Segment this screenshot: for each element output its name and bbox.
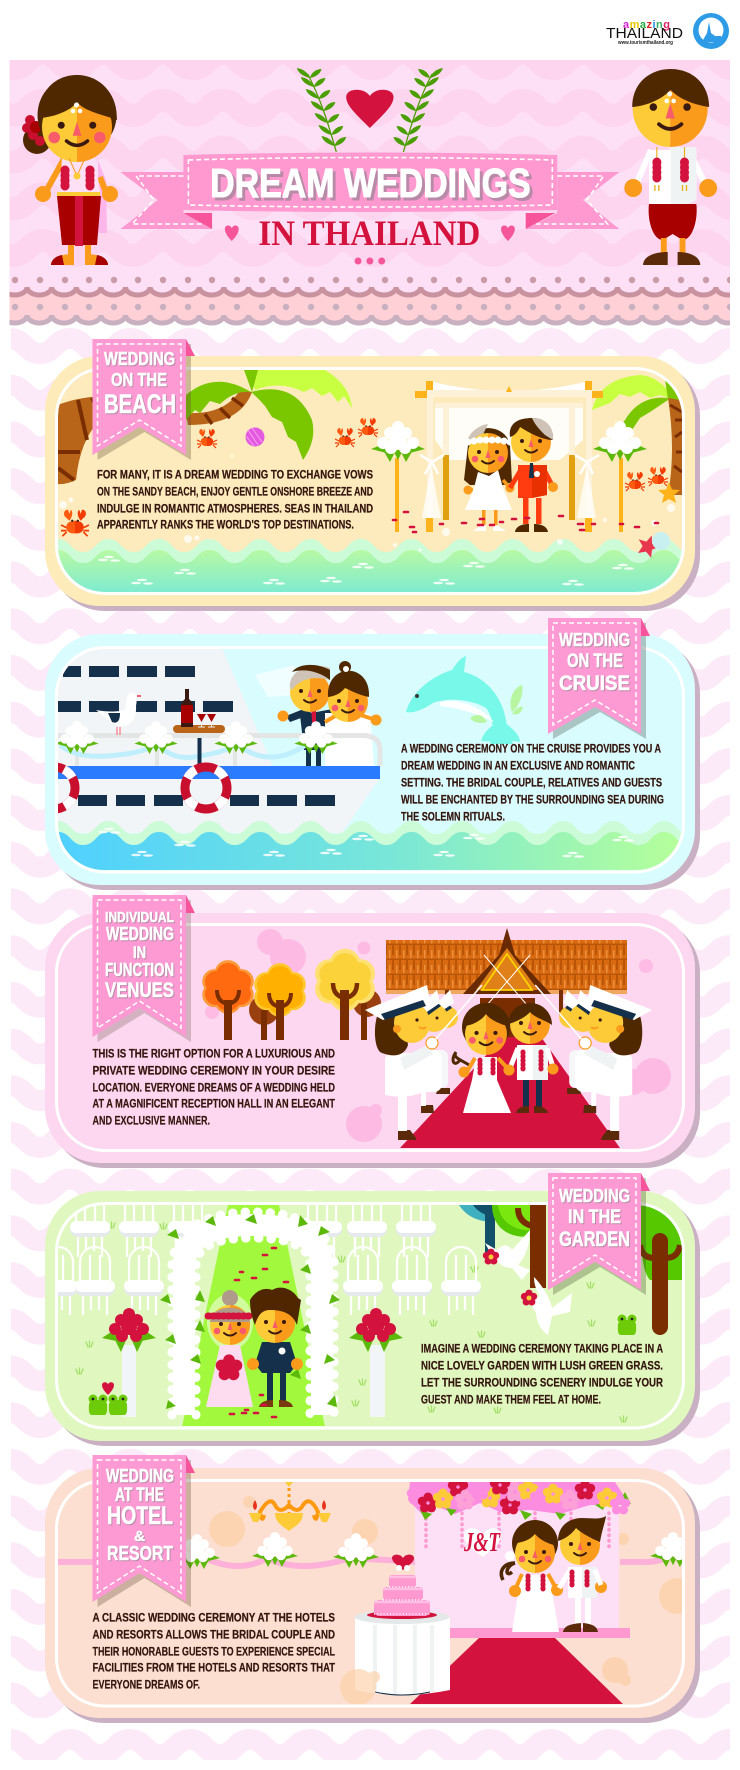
ship hull: [58, 648, 380, 833]
text: cruise description: DREAM WEDDING IN AN EXCLUSIVE AND ROMANTIC: [401, 758, 635, 772]
text: cruise description: WILL BE ENCHANTED BY THE SURROUNDING SEA DURING: [401, 792, 664, 806]
logo: amazing thailand: THAILAND: [606, 25, 683, 42]
header centre artwork: [120, 68, 619, 264]
panel: wedding on the beach: [45, 339, 714, 620]
text: venues description: AND EXCLUSIVE MANNER.: [92, 1114, 210, 1128]
ribbon: wedding on the beach: [92, 339, 195, 460]
ribbon: individual wedding in function venues: WEDDING: [106, 924, 174, 944]
thai pavilion: [386, 928, 627, 1040]
rose petals: [393, 512, 658, 532]
monogram heart: J&T: [463, 1527, 501, 1557]
ribbon tails: [120, 172, 619, 229]
ribbon: wedding in the garden: GARDEN: [559, 1228, 630, 1251]
panel: wedding on the cruise: [33, 618, 714, 902]
text: venues description: [92, 1046, 336, 1128]
panel: wedding in the garden: [38, 1173, 700, 1446]
wedding cake: [367, 1555, 437, 1619]
panel: individual wedding in function venues: [45, 895, 700, 1168]
lace border: [2, 277, 740, 323]
bubbles: [209, 1496, 695, 1686]
wedding arch: [371, 381, 647, 532]
text: cruise description: THE SOLEMN RITUALS.: [401, 810, 505, 824]
text: hotel description: FACILITIES FROM THE HOTELS AND RESORTS THAT: [92, 1660, 336, 1674]
bubbles: [205, 929, 671, 1142]
subtitle: IN THAILAND: [258, 213, 480, 253]
text: beach description: ON THE SANDY BEACH, ENJOY GENTLE ONSHORE BREEZE AND: [97, 484, 373, 498]
wedding table: [354, 1610, 450, 1695]
white flowers on swag: [174, 1532, 696, 1569]
ribbon: wedding on the beach: ON THE: [111, 370, 167, 390]
ribbon: wedding at the hotel and resort: &: [134, 1528, 145, 1545]
icon: small hearts and dots: [225, 225, 515, 264]
text: beach description: [97, 468, 373, 532]
text: hotel description: AND RESORTS ALLOWS THE BRIDAL COUPLE AND: [92, 1628, 335, 1642]
backdrop stage: [415, 1500, 630, 1638]
ribbon: wedding on the beach: BEACH: [104, 389, 176, 419]
ribbon: individual wedding in function venues: FUNCTION: [105, 960, 174, 980]
ribbon: individual wedding in function venues: VENUES: [105, 979, 174, 1002]
venue scene: [202, 928, 671, 1148]
pink swag: [58, 1555, 672, 1566]
water: [58, 532, 682, 592]
palm tree left: [58, 370, 352, 484]
grass aisle: [182, 1205, 325, 1427]
red carpet: [400, 1037, 620, 1148]
text: beach description: INDULGE IN ROMANTIC ATMOSPHERES. SEAS IN THAILAND: [97, 502, 373, 516]
bride and groom: [464, 418, 558, 532]
ribbon: wedding on the cruise: [548, 618, 650, 739]
ribbon: wedding at the hotel and resort: RESORT: [107, 1543, 173, 1565]
thai couple: [453, 1003, 558, 1113]
character: man in thai dress: [624, 69, 717, 265]
text: venues description: PRIVATE WEDDING CEREMONY IN YOUR DESIRE: [92, 1064, 335, 1078]
title: DREAM WEDDINGS: [210, 160, 531, 206]
text: hotel description: [92, 1610, 336, 1692]
text: beach description: FOR MANY, IT IS A DREAM WEDDING TO EXCHANGE VOWS: [97, 468, 373, 482]
ribbon: wedding on the cruise: WEDDING: [559, 630, 630, 650]
text: garden description: IMAGINE A WEDDING CEREMONY TAKING PLACE IN A: [421, 1342, 663, 1356]
chandelier: [249, 1482, 331, 1531]
logo: amazing thailand: amazing: [623, 19, 670, 31]
rose petals: [230, 1248, 288, 1417]
ribbon: wedding at the hotel and resort: AT THE: [115, 1485, 164, 1506]
veil: [255, 665, 295, 697]
text: hotel description: EVERYONE DREAMS OF.: [92, 1678, 200, 1692]
flower canopy: [407, 1474, 631, 1520]
text: garden description: [421, 1342, 663, 1406]
trees: [202, 949, 381, 1040]
ribbon main: [183, 152, 557, 212]
water: [58, 821, 682, 870]
text: garden description: GUEST AND MAKE THEM FEEL AT HOME.: [421, 1392, 601, 1406]
bead strands: [426, 1513, 609, 1551]
ribbon: individual wedding in function venues: IN: [133, 943, 146, 962]
red carpet: [409, 1638, 624, 1705]
columns with red flowers: [102, 1308, 403, 1417]
text: garden description: LET THE SURROUNDING SCENERY INDULGE YOUR: [421, 1376, 663, 1390]
palm tree right: [592, 372, 682, 495]
text: hotel description: THEIR HONORABLE GUESTS TO EXPERIENCE SPECIAL: [92, 1644, 335, 1658]
ribbon: wedding in the garden: IN THE: [568, 1207, 621, 1228]
ribbon: wedding at the hotel and resort: HOTEL: [107, 1502, 173, 1530]
lifebuoys: [33, 767, 227, 809]
hotel couple: [501, 1516, 607, 1632]
panel: wedding at the hotel and resort: [45, 1455, 700, 1723]
header banner: [2, 60, 740, 323]
logo: amazing thailand: www.tourismthailand.org: [617, 40, 673, 46]
ribbon: wedding on the cruise: CRUISE: [559, 672, 630, 695]
text: hotel description: A CLASSIC WEDDING CEREMONY AT THE HOTELS: [92, 1610, 335, 1624]
icon: dolphin: [406, 656, 523, 744]
wine table: [173, 689, 225, 764]
icon: big heart: [346, 90, 394, 128]
logo: seal: [693, 13, 729, 49]
text: beach description: APPARENTLY RANKS THE WORLD'S TOP DESTINATIONS.: [97, 518, 354, 532]
rows of white chairs: [38, 1205, 481, 1315]
seagull: [96, 693, 141, 735]
ribbon: individual wedding in function venues: INDIVIDUAL: [105, 909, 174, 926]
garden scene: [38, 1205, 682, 1427]
text: cruise description: SETTING. THE BRIDAL COUPLE, RELATIVES AND GUESTS: [401, 776, 662, 790]
garden couple: [206, 1288, 303, 1407]
couple on deck: [278, 661, 382, 767]
character: woman in thai dress: [22, 75, 118, 265]
ribbon: individual wedding in function venues: [92, 895, 195, 1042]
bubble overlay: [340, 1669, 380, 1705]
blue stripe: [58, 766, 380, 779]
ribbon: wedding in the garden: [548, 1173, 650, 1295]
ribbon: wedding in the garden: WEDDING: [559, 1186, 630, 1206]
text: cruise description: [401, 742, 664, 824]
logo: amazing thailand: [606, 19, 683, 46]
icon: left laurel branch: [297, 68, 346, 152]
background wave pattern: [11, 327, 730, 1760]
grass tufts: [76, 1222, 627, 1422]
icon: right laurel branch: [394, 68, 443, 152]
crabs, shells and starfish: [61, 418, 680, 536]
hotel scene: [58, 1474, 696, 1705]
text: venues description: LOCATION. EVERYONE DREAMS OF A WEDDING HELD: [92, 1080, 335, 1094]
cruise scene: [58, 649, 682, 870]
officers with swords: [365, 985, 652, 1140]
frogs: [88, 1314, 636, 1415]
doves: [483, 1230, 572, 1335]
text: cruise description: A WEDDING CEREMONY ON THE CRUISE PROVIDES YOU A: [401, 742, 661, 756]
trees: [459, 1205, 682, 1335]
flower arch: [160, 1212, 340, 1415]
deck railing: [55, 721, 380, 766]
sand bubbles: [59, 454, 675, 552]
ribbon: wedding on the cruise: ON THE: [567, 651, 623, 672]
logos: [606, 13, 729, 49]
text: garden description: NICE LOVELY GARDEN WITH LUSH GREEN GRASS.: [421, 1358, 663, 1372]
ribbon: wedding at the hotel and resort: WEDDING: [106, 1466, 174, 1486]
ribbon: wedding on the beach: WEDDING: [104, 349, 175, 369]
text: venues description: AT A MAGNIFICENT RECEPTION HALL IN AN ELEGANT: [92, 1096, 336, 1110]
beach scene: [58, 370, 682, 592]
text: venues description: THIS IS THE RIGHT OPTION FOR A LUXURIOUS AND: [92, 1046, 335, 1060]
ribbon: wedding at the hotel and resort: [92, 1455, 195, 1607]
